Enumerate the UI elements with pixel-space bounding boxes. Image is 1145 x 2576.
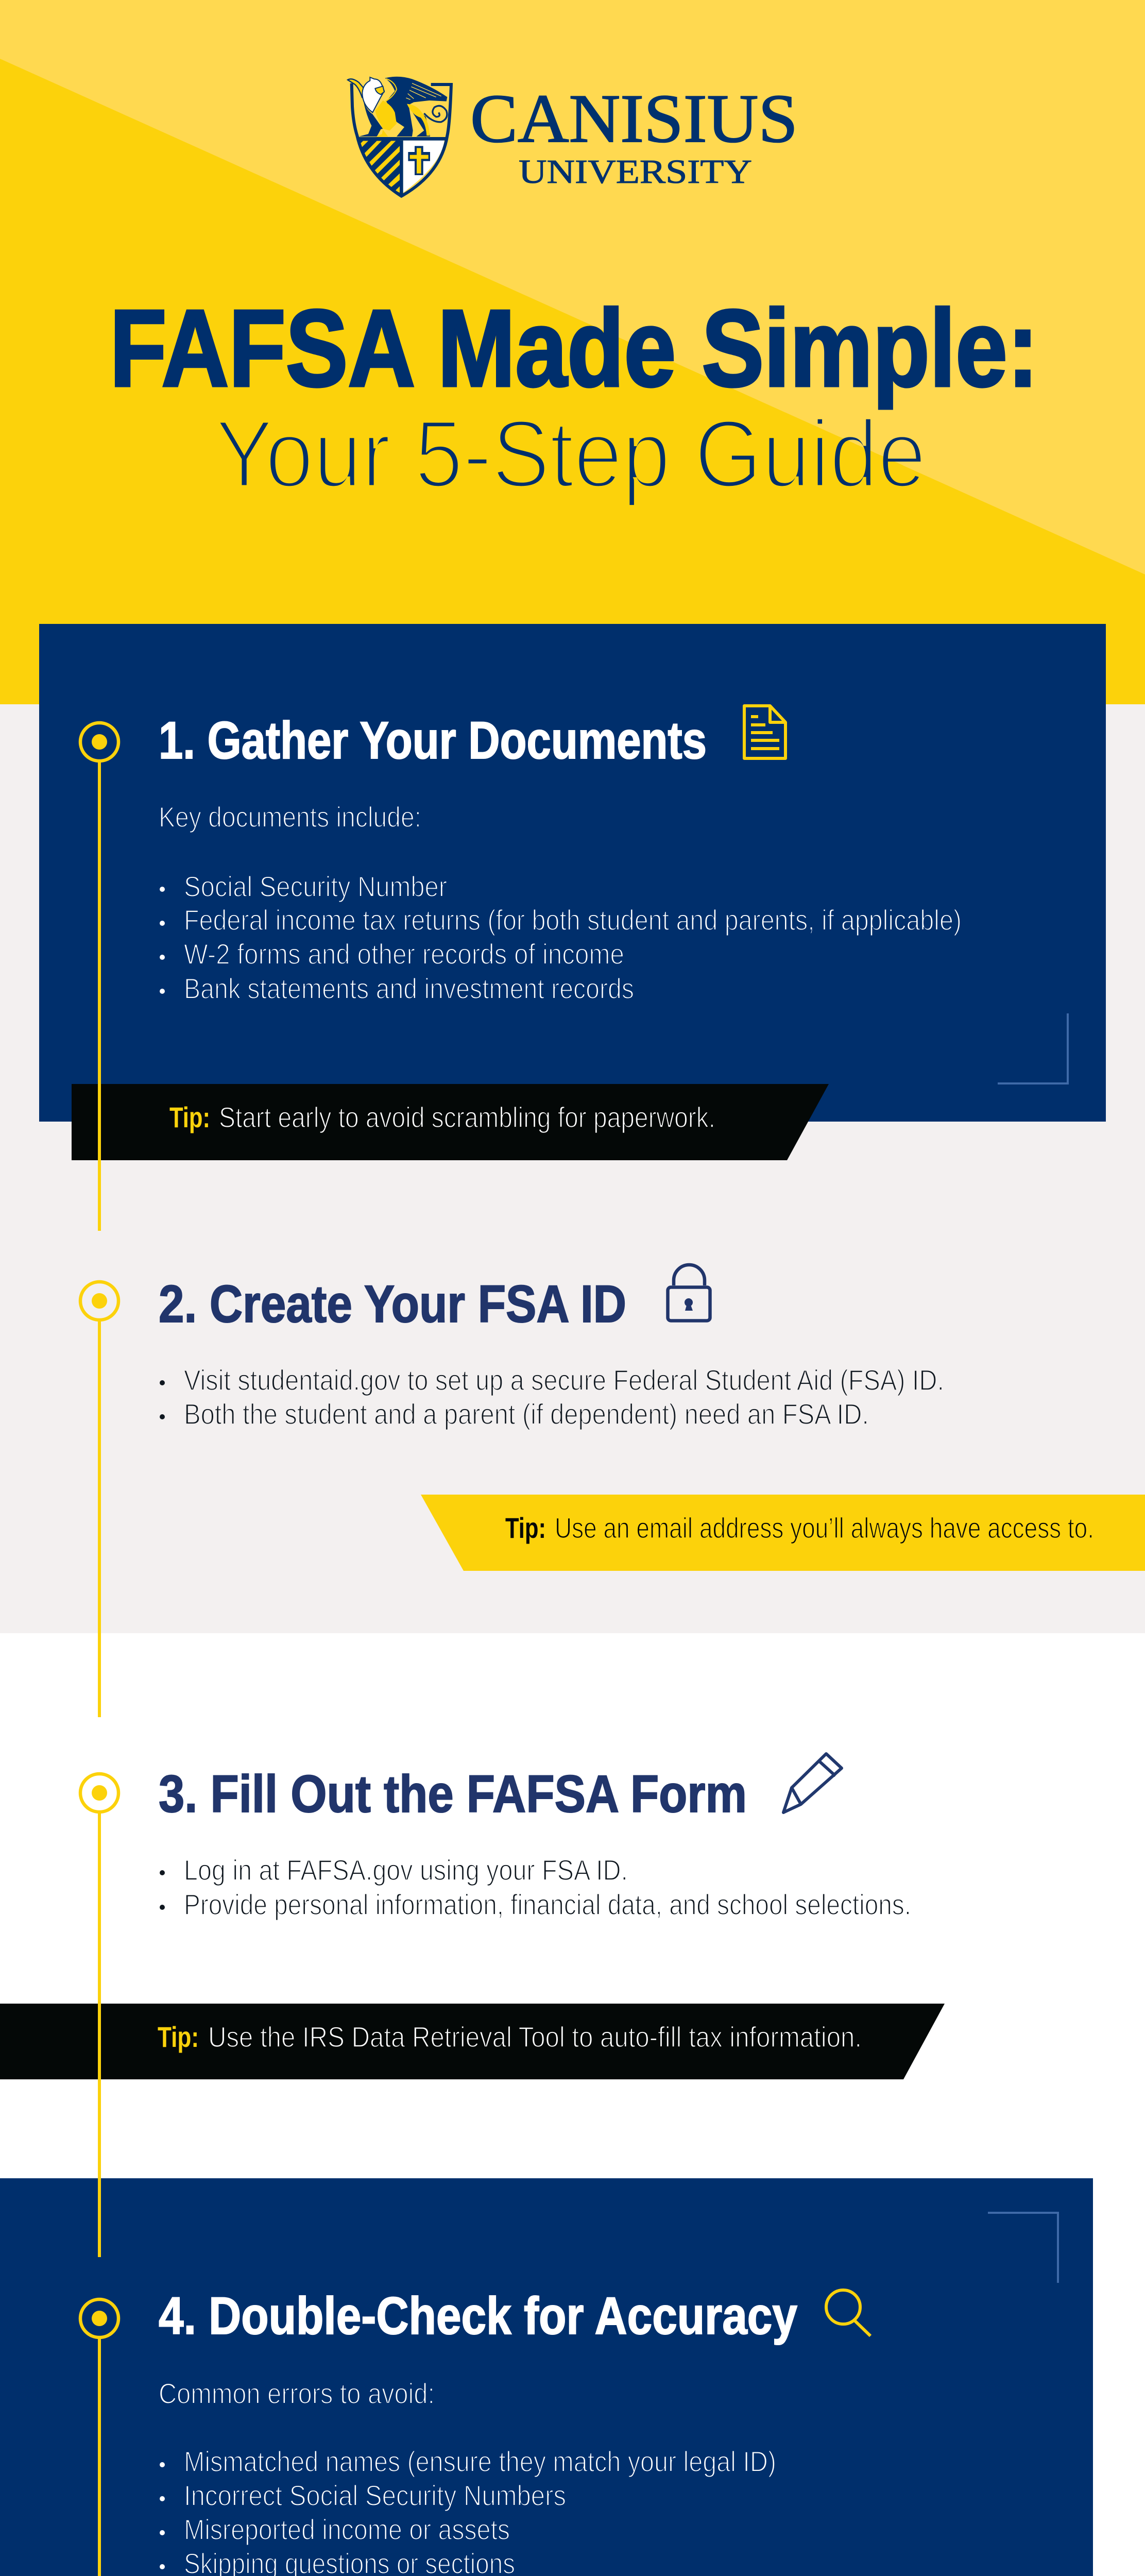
logo: Canisius University (348, 77, 798, 196)
timeline (80, 723, 118, 2576)
text: common errors intro: Common errors to avoid: (159, 2377, 435, 2410)
header background (0, 0, 1145, 704)
tip: step 3: Tip: (158, 2021, 199, 2053)
tip: step 1: Tip: (169, 1101, 210, 1133)
wordmark: Canisius: CANISIUS (470, 80, 798, 157)
wordmark: University: UNIVERSITY (519, 153, 752, 191)
tip: step 2: Tip: (505, 1512, 546, 1544)
icon: document (744, 706, 785, 758)
list: common errors: Misreported income or assets (184, 2513, 510, 2546)
list: common errors: Incorrect Social Security Numbers (184, 2479, 566, 2512)
icon: griffin shield crest (348, 77, 451, 196)
list: common errors (160, 2445, 776, 2576)
section: step 3 fill out the FAFSA form (159, 1754, 911, 1921)
marker: step 1 (80, 723, 118, 761)
icon: magnifying glass (826, 2290, 870, 2336)
icon: padlock (668, 1265, 710, 1321)
tip: step 3: Use the IRS Data Retrieval Tool to auto-fill tax information. (208, 2021, 862, 2053)
corner bracket (998, 1013, 1068, 1083)
list: common errors: Mismatched names (ensure they match your legal ID) (184, 2445, 776, 2478)
grey section background (0, 704, 1145, 1633)
corner bracket (988, 2213, 1058, 2283)
marker: step 2 (80, 1282, 118, 1320)
list: FAFSA form steps: Provide personal information, financial data, and school selections. (184, 1888, 911, 1921)
list: key documents: Bank statements and investment records (184, 972, 634, 1005)
list: FSA ID steps (160, 1364, 944, 1430)
heading: step 2: 2. Create Your FSA ID (159, 1275, 626, 1333)
icon: pencil (783, 1754, 842, 1812)
list: key documents: Federal income tax returns (for both student and parents, if applicable) (184, 904, 962, 936)
tip: step 2 (421, 1495, 1145, 1571)
tip: step 1 (72, 1084, 829, 1160)
list: FAFSA form steps (160, 1854, 911, 1921)
list: key documents: Social Security Number (184, 870, 447, 903)
heading: step 4: 4. Double-Check for Accuracy (159, 2286, 797, 2345)
panel: step 1 gather your documents (39, 624, 1106, 1122)
panel: step 4 double-check for accuracy (0, 2178, 1093, 2576)
heading: step 1: 1. Gather Your Documents (159, 711, 707, 770)
list: FSA ID steps: Both the student and a parent (if dependent) need an FSA ID. (184, 1398, 869, 1430)
list: FAFSA form steps: Log in at FAFSA.gov using your FSA ID. (184, 1854, 628, 1886)
heading: step 3: 3. Fill Out the FAFSA Form (159, 1765, 747, 1823)
section: step 2 create your FSA ID (159, 1265, 944, 1430)
marker: step 3 (80, 1774, 118, 1812)
list: key documents (160, 870, 962, 1005)
list: key documents: W-2 forms and other records of income (184, 938, 624, 970)
tip: step 1: Start early to avoid scrambling for paperwork. (219, 1101, 715, 1133)
tip: step 3 (0, 2004, 945, 2079)
marker: step 4 (80, 2299, 118, 2337)
subtitle: Your 5-Step Guide (215, 401, 926, 507)
text: key documents intro: Key documents include: (159, 801, 421, 833)
list: FSA ID steps: Visit studentaid.gov to set up a secure Federal Student Aid (FSA) ID. (184, 1364, 944, 1396)
